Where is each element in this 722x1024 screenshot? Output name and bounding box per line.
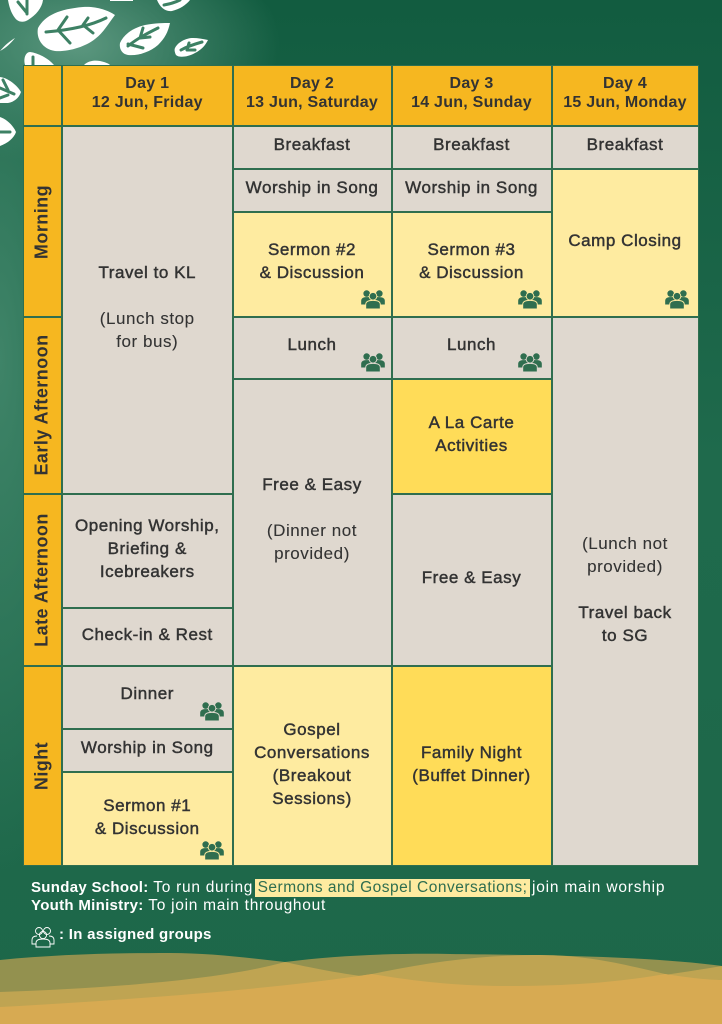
day 1: travel: for bus) [116, 332, 178, 350]
legend label: : In assigned groups [59, 926, 212, 943]
day 2: free and easy: (Dinner not [267, 520, 357, 540]
day 4: camp closing [552, 168, 698, 317]
row label: Night [22, 666, 62, 866]
header: Day 1 [62, 65, 232, 126]
day 1: sermon 1: & Discussion [95, 818, 200, 838]
icon: group, camp closing [665, 290, 689, 308]
day 2: gospel conversations: Sessions) [272, 788, 352, 808]
header: Day 2: Day 2 [290, 75, 334, 92]
day 2: worship [232, 168, 392, 212]
day 4: travel back: provided) [587, 556, 663, 576]
icon: group, day 1 dinner [200, 702, 224, 720]
day 1: opening worship [62, 494, 232, 608]
day 3: worship: Worship in Song [405, 178, 538, 196]
day 2: sermon 2: Sermon #2 [268, 240, 356, 258]
day 3: lunch: Lunch [447, 334, 496, 354]
day 1: sermon 1: Sermon #1 [103, 796, 191, 814]
day 3: sermon 3: & Discussion [419, 262, 524, 282]
icon: group, day 3 lunch [518, 353, 542, 372]
day 2: lunch [232, 317, 392, 379]
icon: group, day 1 sermon [200, 841, 224, 860]
day 1: opening worship: Opening Worship, [75, 516, 220, 534]
day 4: travel back: Travel back [578, 602, 672, 622]
day 1: worship: Worship in Song [81, 738, 214, 756]
icon: group, day 2 lunch [361, 353, 385, 372]
footer notes [31, 879, 665, 948]
day 1: sermon 1 [62, 772, 232, 866]
day 4: travel back: to SG [602, 626, 648, 644]
header: Day 4: 15 Jun, Monday [563, 94, 687, 111]
day 3: free and easy [392, 494, 552, 666]
day 3: free and easy: Free & Easy [422, 568, 521, 586]
day 1: check-in: Check-in & Rest [82, 624, 213, 644]
day 3: breakfast: Breakfast [433, 134, 510, 154]
day 2: sermon 2 [232, 212, 392, 317]
day 2: free and easy: provided) [274, 544, 350, 562]
day 3: family night [392, 666, 552, 866]
header: Day 1: Day 1 [125, 75, 169, 92]
day 1: check-in [62, 608, 232, 666]
day 3: lunch [392, 317, 552, 379]
header: Day 3: Day 3 [450, 75, 493, 92]
row label: Late Afternoon: Late Afternoon [32, 513, 52, 646]
leaf cluster [0, 0, 208, 146]
header: Day 2 [232, 65, 392, 126]
header: Day 3: 14 Jun, Sunday [411, 94, 532, 111]
day 1: dinner: Dinner [121, 684, 174, 702]
day 3: family night: (Buffet Dinner) [412, 766, 531, 784]
day 3: worship [392, 168, 552, 212]
day 1: travel: Travel to KL [98, 262, 196, 282]
row label: Early Afternoon: Early Afternoon [32, 335, 52, 476]
day 4: travel back: (Lunch not [582, 534, 668, 552]
day 2: worship: Worship in Song [246, 178, 378, 196]
day 3: sermon 3 [392, 212, 552, 317]
icon: group, day 3 sermon [518, 290, 542, 308]
note: main worship: join main worship [532, 879, 665, 896]
day 2: breakfast [232, 126, 392, 168]
day 4: breakfast [552, 126, 698, 168]
day 1: dinner [62, 666, 232, 729]
day 1: opening worship: Icebreakers [100, 562, 195, 580]
day 3: a la carte: A La Carte [429, 412, 514, 432]
day 2: gospel conversations: Gospel [283, 720, 341, 738]
header: Day 1: 12 Jun, Friday [92, 94, 203, 111]
day 3: a la carte: Activities [435, 436, 508, 454]
day 4: travel back [552, 317, 698, 866]
note: sunday school: Sunday School: To run during [31, 879, 253, 896]
icon: group outline [32, 927, 54, 948]
day 2: gospel conversations [232, 666, 392, 866]
day 2: lunch: Lunch [287, 334, 337, 354]
day 3: a la carte [392, 379, 552, 494]
header: Day 4: Day 4 [603, 75, 647, 92]
day 2: free and easy [232, 379, 392, 666]
day 3: sermon 3: Sermon #3 [427, 240, 516, 258]
row label: Morning [22, 126, 62, 317]
day 2: free and easy: Free & Easy [262, 474, 362, 494]
note: youth ministry: Youth Ministry: To join main throughout [31, 897, 326, 914]
row label: Morning: Morning [32, 184, 52, 259]
row label: Night: Night [32, 742, 52, 790]
day 1: opening worship: Briefing & [108, 538, 187, 558]
day 2: gospel conversations: Conversations [254, 742, 370, 762]
day 1: travel [62, 126, 232, 494]
day 4: camp closing: Camp Closing [568, 230, 682, 250]
icon: group, day 2 sermon [361, 290, 385, 308]
day 3: breakfast [392, 126, 552, 168]
day 3: family night: Family Night [421, 742, 522, 762]
day 1: worship [62, 729, 232, 772]
corner cell [22, 65, 62, 126]
header: Day 3 [392, 65, 552, 126]
day 2: sermon 2: & Discussion [260, 262, 364, 282]
header: Day 4 [552, 65, 698, 126]
day 1: travel: (Lunch stop [100, 308, 195, 328]
day 4: breakfast: Breakfast [587, 134, 663, 154]
day 2: breakfast: Breakfast [274, 134, 350, 154]
row label: Early Afternoon [22, 317, 62, 494]
day 2: gospel conversations: (Breakout [273, 766, 351, 784]
header: Day 2: 13 Jun, Saturday [246, 94, 378, 111]
dunes [0, 953, 722, 1024]
row label: Late Afternoon [22, 494, 62, 666]
highlighted text: Sermons and Gospel Conversations; [258, 879, 527, 896]
